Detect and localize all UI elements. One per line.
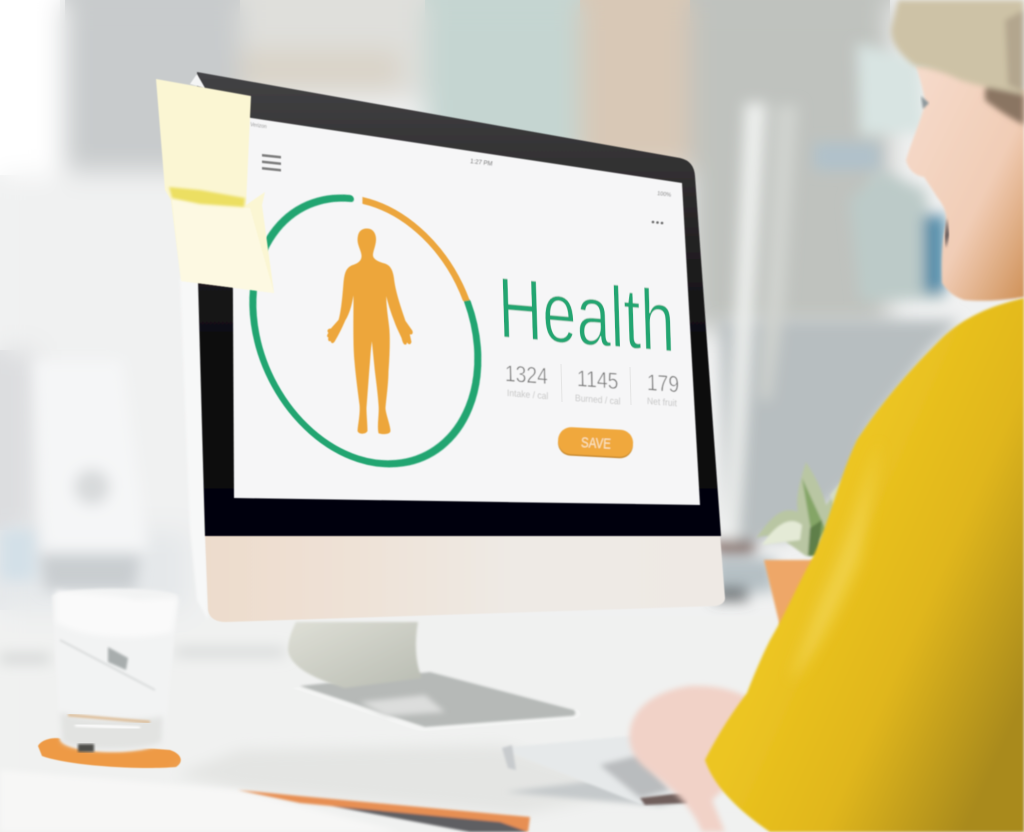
monitor left edge (180, 278, 208, 620)
person: hand on keyboard (630, 686, 760, 832)
sticky note (156, 74, 274, 293)
potted plant (756, 462, 868, 626)
sticky note tape stripe (169, 187, 245, 207)
papers on desk (0, 770, 400, 832)
person: yellow sweater (705, 298, 1024, 832)
progress ring (243, 183, 488, 479)
stat: 1145 burned (575, 365, 621, 407)
stat divider (561, 364, 562, 402)
coaster (38, 738, 181, 768)
stat: 1324 intake: 1324 (505, 360, 548, 389)
ring: green segment (243, 183, 488, 479)
keyboard and paper (500, 735, 690, 806)
monitor black bezel (197, 72, 721, 536)
stand neck (288, 622, 422, 688)
stat: 179 net: 179 (647, 369, 679, 398)
blurred background objects (0, 43, 960, 662)
monitor stand (288, 622, 580, 731)
person: face (906, 66, 1024, 301)
person: hair (891, 0, 1024, 125)
save button: SAVE (581, 435, 612, 453)
stat: 179 net: Net fruit (647, 396, 677, 408)
save button (557, 427, 634, 459)
icon: human body silhouette (328, 229, 412, 434)
water glass on coaster (38, 588, 181, 768)
status bar time: 1:27 PM (470, 159, 493, 168)
monitor chin (205, 534, 725, 622)
stand base (292, 672, 580, 731)
app screen (232, 115, 700, 505)
glass (52, 588, 178, 752)
stat: 1324 intake: Intake / cal (507, 388, 548, 401)
stat: 1145 burned: Burned / cal (575, 393, 621, 407)
status bar left: Verizon (250, 122, 267, 130)
person: eye shadow (921, 96, 929, 109)
person: mouth shadow (945, 218, 949, 248)
heading: Health: Health (497, 259, 676, 370)
icon: three dots menu (652, 221, 663, 224)
icon: hamburger menu (262, 154, 281, 172)
orange pencil on desk (238, 790, 530, 832)
ring: orange segment (362, 200, 466, 301)
stat: 1145 burned: 1145 (577, 365, 619, 394)
status bar battery: 100% (657, 191, 672, 199)
stat divider (630, 367, 631, 405)
desk shadow band (175, 745, 640, 815)
